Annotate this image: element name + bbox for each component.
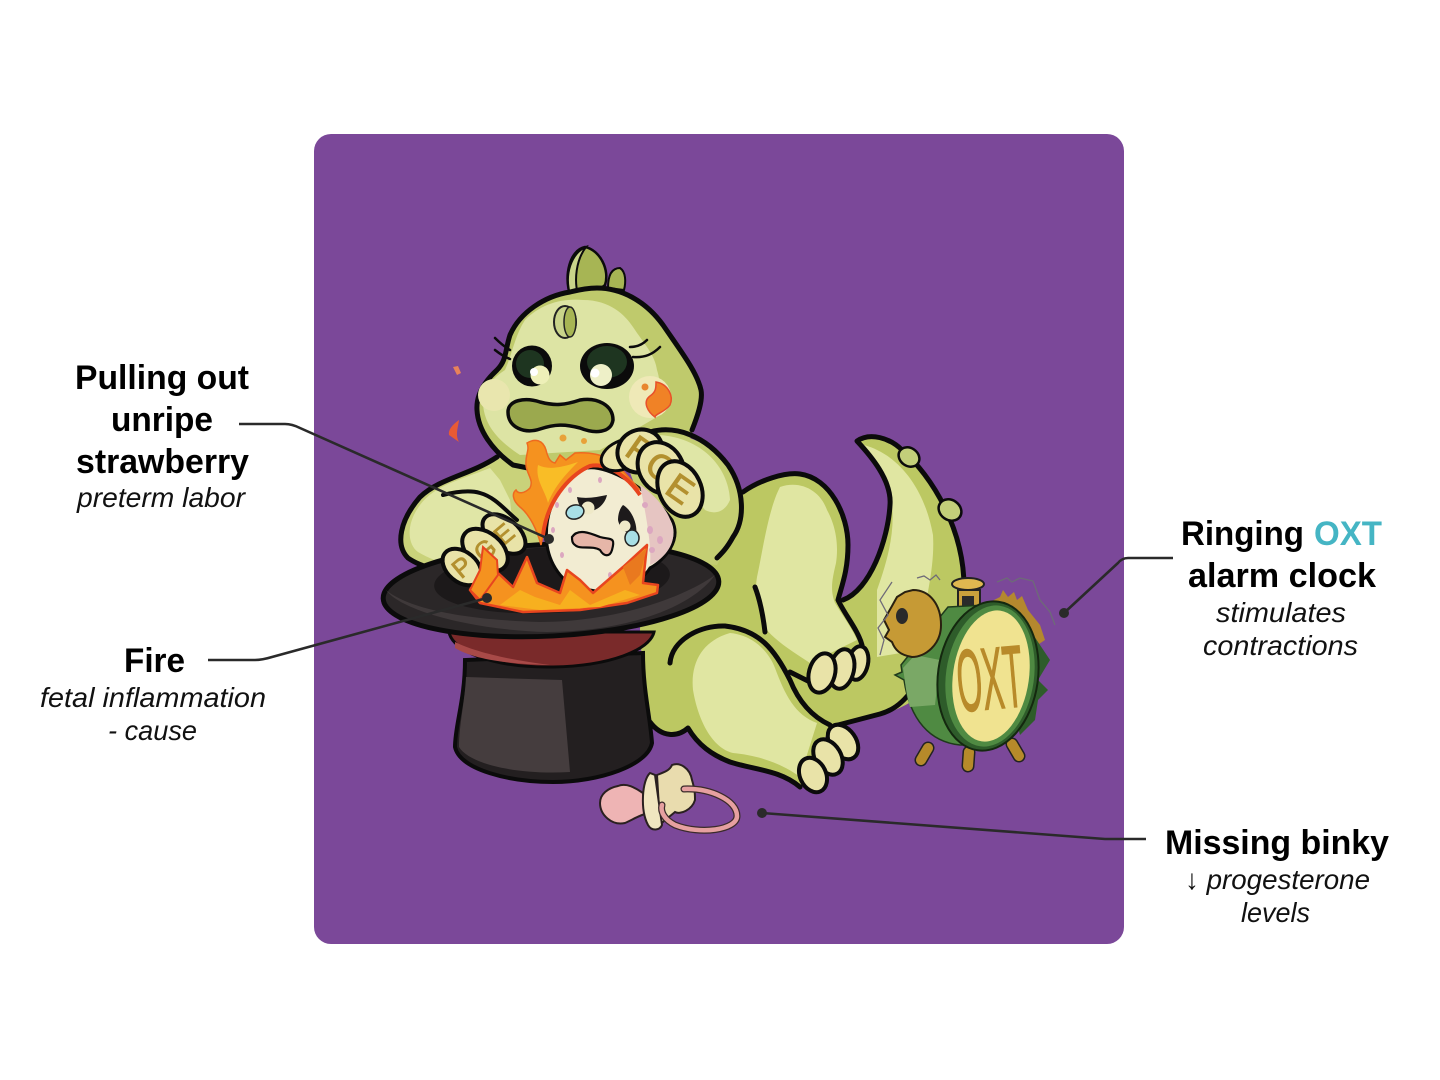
top hat xyxy=(381,535,721,782)
dinosaur body and legs xyxy=(640,470,862,787)
label: missing binky: levels xyxy=(1241,897,1310,928)
vibration lines xyxy=(878,575,1055,655)
clock back bell xyxy=(990,590,1045,650)
crying eyes xyxy=(564,495,639,555)
left hand PGE fingers: G xyxy=(468,532,502,568)
sparks xyxy=(449,366,587,444)
leader line: missing binky xyxy=(757,808,1146,839)
right hand PGE fingers: E xyxy=(659,465,702,512)
dinosaur left arm xyxy=(401,450,545,580)
dinosaur toes xyxy=(794,644,871,797)
dinosaur head xyxy=(477,247,701,480)
flame in hat xyxy=(470,545,658,612)
dinosaur tail xyxy=(800,437,966,732)
clock face xyxy=(928,595,1050,757)
clock body xyxy=(895,605,985,745)
label: ringing OXT alarm clock: OXT xyxy=(1314,515,1382,553)
strawberry face xyxy=(546,468,675,591)
left hand PGE fingers: P xyxy=(446,550,478,584)
cheek flame xyxy=(646,382,671,417)
panel: purple background xyxy=(314,134,1124,944)
clock left bell xyxy=(884,590,941,657)
clock feet xyxy=(921,744,1019,766)
right hand PGE fingers: P xyxy=(619,427,662,474)
right hand PGE fingers xyxy=(596,421,711,524)
illustration: dinosaur with hat, strawberry and clock xyxy=(381,247,1055,830)
label: ringing OXT alarm clock: Ringing xyxy=(1181,515,1304,553)
label: pulling out unripe strawberry: Pulling out xyxy=(75,359,249,397)
label: fire: Fire xyxy=(124,642,185,680)
leader line: pulling out unripe strawberry xyxy=(239,424,554,544)
label: ringing OXT alarm clock: alarm clock xyxy=(1188,557,1376,595)
label: missing binky: ↓ progesterone xyxy=(1185,864,1370,895)
label: ringing OXT alarm clock: contractions xyxy=(1203,630,1358,661)
label: ringing OXT alarm clock: stimulates xyxy=(1216,597,1346,628)
label: pulling out unripe strawberry: unripe xyxy=(111,401,213,439)
clock face: OXT xyxy=(953,626,1027,731)
label: pulling out unripe strawberry: strawberry xyxy=(76,443,249,481)
dinosaur right arm xyxy=(620,430,741,565)
eyes xyxy=(495,338,660,389)
label: pulling out unripe strawberry: preterm labor xyxy=(76,482,247,513)
label: ringing OXT alarm clock xyxy=(1181,515,1382,661)
mouth xyxy=(508,399,613,432)
label: pulling out unripe strawberry xyxy=(75,359,249,513)
label: missing binky: Missing binky xyxy=(1165,824,1389,862)
right hand PGE fingers: G xyxy=(638,443,685,492)
label: missing binky xyxy=(1165,824,1389,928)
alarm clock xyxy=(878,575,1055,766)
pacifier xyxy=(600,764,737,830)
label: fire: fetal inflammation xyxy=(40,682,266,713)
left hand PGE fingers xyxy=(436,506,533,600)
forehead spike xyxy=(554,306,576,338)
label: fire xyxy=(40,642,266,746)
leader line: fire xyxy=(208,593,492,660)
leader line: ringing OXT alarm clock xyxy=(1059,558,1173,618)
left hand PGE fingers: E xyxy=(488,517,520,551)
clock knob xyxy=(952,578,984,615)
flame on strawberry xyxy=(513,440,640,545)
label: fire: - cause xyxy=(108,715,197,746)
